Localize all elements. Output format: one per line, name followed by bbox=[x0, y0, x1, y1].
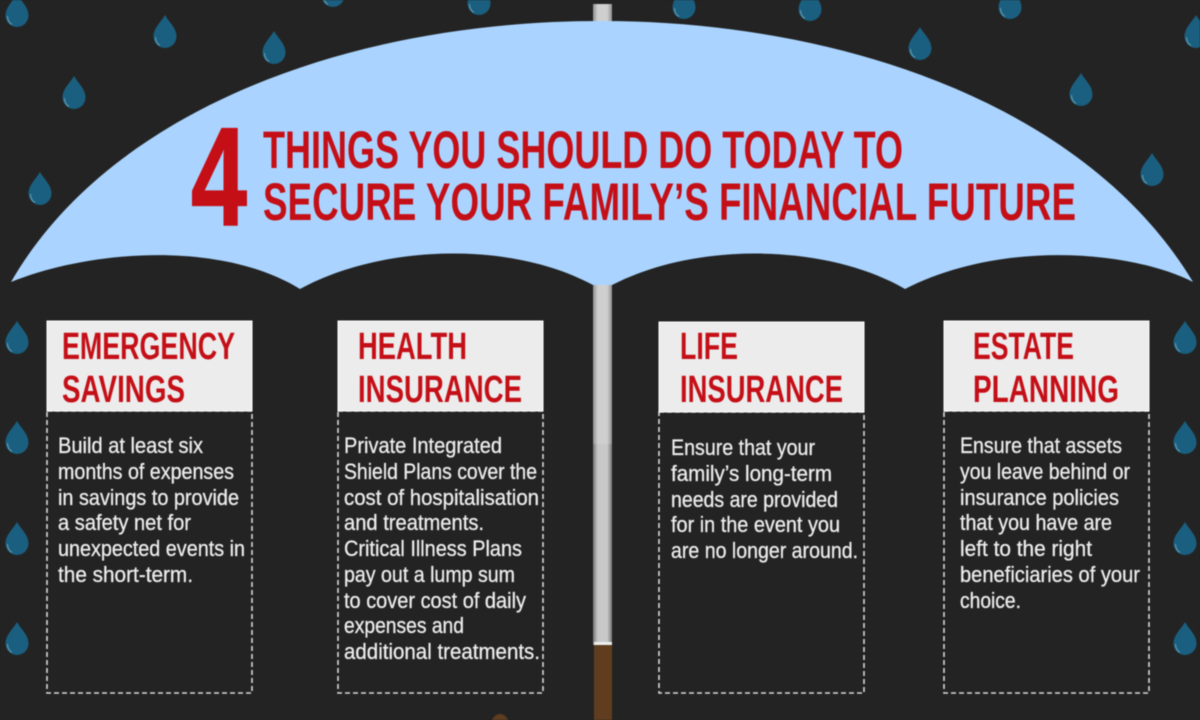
body text: health insurance: Critical Illness Plans bbox=[344, 536, 522, 561]
body text: life insurance bbox=[671, 435, 858, 563]
heading: health insurance: HEALTH bbox=[358, 326, 467, 368]
heading: life insurance: INSURANCE bbox=[680, 369, 843, 411]
umbrella canopy bbox=[11, 21, 1193, 289]
panel: estate planning bbox=[944, 321, 1149, 693]
title line 1: THINGS YOU SHOULD DO TODAY TO bbox=[263, 121, 903, 180]
body text: emergency savings: in savings to provide bbox=[58, 485, 239, 510]
body text: health insurance bbox=[344, 433, 540, 664]
body text: estate planning: left to the right bbox=[960, 536, 1092, 561]
body text: estate planning: insurance policies bbox=[960, 485, 1119, 510]
heading: emergency savings bbox=[47, 321, 252, 411]
body text: health insurance: and treatments. bbox=[344, 510, 484, 535]
panel: health insurance bbox=[338, 321, 543, 693]
body text: estate planning: you leave behind or bbox=[960, 459, 1130, 484]
heading: estate planning: ESTATE bbox=[973, 326, 1074, 368]
body text: emergency savings: unexpected events in bbox=[58, 536, 245, 561]
title bbox=[191, 98, 1076, 255]
body text: emergency savings: months of expenses bbox=[58, 459, 234, 484]
heading: emergency savings: SAVINGS bbox=[62, 369, 185, 411]
body text: estate planning: Ensure that assets bbox=[960, 433, 1122, 458]
body text: estate planning: that you have are bbox=[960, 510, 1112, 535]
body text: estate planning: beneficiaries of your bbox=[960, 562, 1140, 587]
body text: emergency savings: the short-term. bbox=[58, 562, 193, 587]
umbrella handle tip bbox=[492, 714, 508, 720]
body text: life insurance: Ensure that your bbox=[671, 435, 815, 460]
heading: life insurance: LIFE bbox=[680, 326, 738, 368]
body text: emergency savings: Build at least six bbox=[58, 433, 203, 458]
heading: health insurance: INSURANCE bbox=[358, 369, 522, 411]
heading: life insurance bbox=[659, 322, 864, 412]
heading: health insurance bbox=[338, 321, 543, 411]
body text: life insurance: are no longer around. bbox=[671, 538, 858, 563]
body text: emergency savings bbox=[58, 433, 245, 587]
panel: life insurance bbox=[659, 322, 864, 693]
body text: life insurance: for in the event you bbox=[671, 512, 840, 537]
heading: emergency savings: EMERGENCY bbox=[62, 326, 235, 368]
body text: health insurance: additional treatments. bbox=[344, 639, 540, 664]
body text: estate planning: choice. bbox=[960, 588, 1021, 613]
body text: health insurance: expenses and bbox=[344, 613, 464, 638]
body text: life insurance: family’s long-term bbox=[671, 461, 832, 486]
body text: health insurance: to cover cost of daily bbox=[344, 588, 526, 613]
umbrella pole bbox=[593, 4, 612, 720]
body text: estate planning bbox=[960, 433, 1140, 613]
body text: health insurance: pay out a lump sum bbox=[344, 562, 515, 587]
title numeral: 4 bbox=[191, 98, 247, 255]
panel: emergency savings bbox=[47, 321, 252, 693]
body text: health insurance: Shield Plans cover the bbox=[344, 459, 537, 484]
body text: health insurance: cost of hospitalisation bbox=[344, 485, 539, 510]
body text: emergency savings: a safety net for bbox=[58, 510, 191, 535]
body text: health insurance: Private Integrated bbox=[344, 433, 502, 458]
heading: estate planning bbox=[944, 321, 1149, 411]
heading: estate planning: PLANNING bbox=[973, 369, 1119, 411]
body text: life insurance: needs are provided bbox=[671, 487, 838, 512]
